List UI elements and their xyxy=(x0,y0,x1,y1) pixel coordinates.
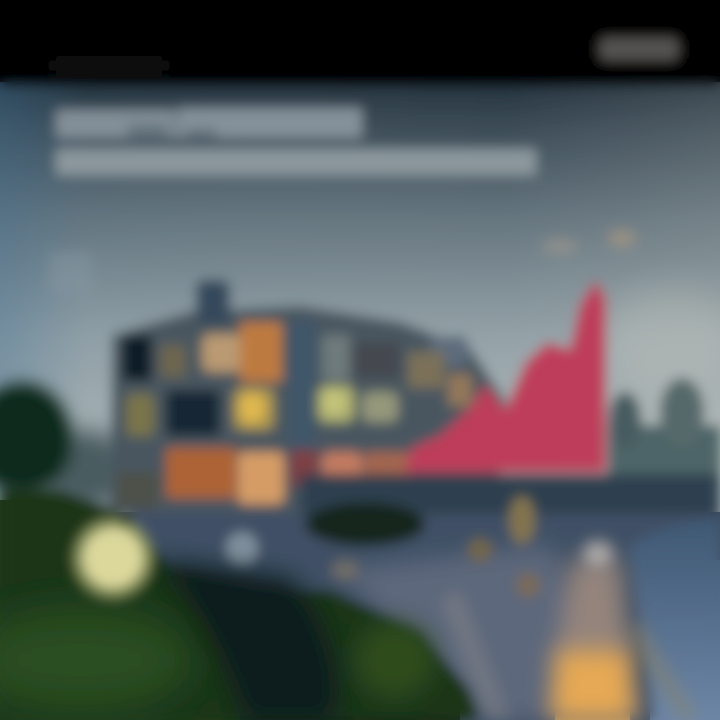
dark far bank xyxy=(300,474,720,514)
road and river foreground xyxy=(130,474,720,720)
roof tower xyxy=(196,280,230,324)
lamp column reflection xyxy=(556,560,630,660)
top header band xyxy=(0,0,720,86)
windows xyxy=(116,320,472,508)
warm posts xyxy=(509,496,535,544)
building xyxy=(110,280,505,515)
title block, illegible xyxy=(56,108,536,175)
green window highlight xyxy=(323,390,345,414)
header button xyxy=(600,38,678,60)
lighter grass xyxy=(0,610,190,710)
green hill xyxy=(0,490,480,720)
rooftop block right xyxy=(430,336,468,366)
dark inner path xyxy=(160,560,337,720)
bright window highlight xyxy=(239,393,265,423)
glowing lamp xyxy=(83,528,143,588)
lamp halo xyxy=(73,518,153,598)
road reflection stripes xyxy=(440,590,700,720)
shrubs left of building xyxy=(40,430,130,510)
lamp glow reflection xyxy=(550,650,636,720)
water surface xyxy=(630,518,720,720)
faint icon in sky xyxy=(48,252,92,292)
road surface xyxy=(340,545,640,720)
dark tree left xyxy=(0,382,72,494)
foreground trees and hill xyxy=(0,382,480,720)
red area chart xyxy=(404,280,606,472)
faint orange marks above chart xyxy=(542,229,636,253)
distant trees on right xyxy=(608,378,720,500)
header label, illegible xyxy=(52,60,166,71)
background sky xyxy=(0,85,720,512)
dark hedge by building xyxy=(305,502,425,546)
building body xyxy=(110,306,505,515)
